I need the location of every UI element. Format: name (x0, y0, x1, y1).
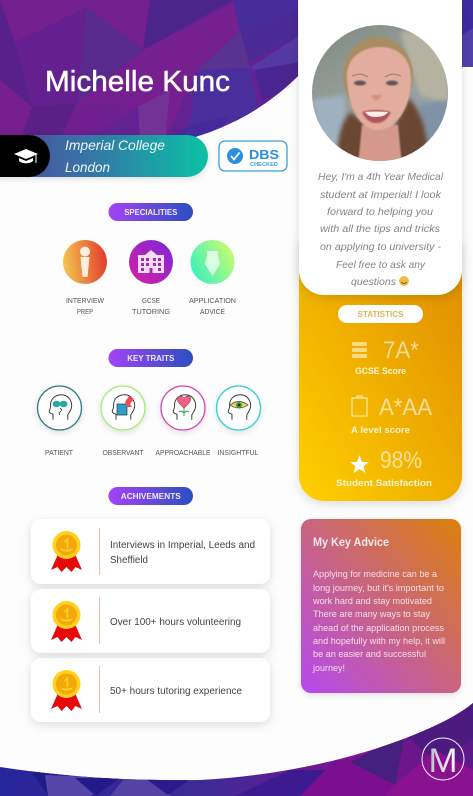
university name (65, 137, 165, 175)
speciality: application advice: APPLICATION (189, 296, 236, 305)
achievements heading (108, 487, 193, 505)
stat: student satisfaction: Student Satisfaction (336, 478, 432, 489)
icon: school building (138, 250, 164, 273)
speciality: application advice: ADVICE (200, 307, 225, 316)
icon: head with lotus (49, 395, 72, 420)
black cap segment (0, 135, 50, 177)
speciality: interview prep: PREP (77, 307, 93, 316)
logo: M monogram (422, 738, 464, 780)
stat: A level score: A*AA (379, 394, 432, 421)
panel: profile card (299, 0, 462, 295)
intro text: Hey, I'm a 4th Year Medical (318, 171, 444, 183)
DBS badge: DBS (249, 147, 279, 162)
intro text: questions (351, 276, 397, 288)
university name: London (65, 159, 110, 175)
speciality: interview prep (63, 240, 107, 316)
icon: microphone (80, 246, 90, 277)
intro text: Feel free to ask any (336, 259, 426, 271)
speciality: GCSE tutoring: TUTORING (132, 307, 170, 316)
university name: Imperial College (65, 137, 165, 153)
right edge purple strip (455, 0, 473, 67)
stat: A level score (351, 394, 432, 436)
advice body: and hopefully with my help, it will (313, 636, 445, 647)
achievement card: interviews: Sheffield (110, 555, 148, 566)
speciality: GCSE tutoring (129, 240, 173, 316)
advice body (312, 569, 445, 674)
stat: student satisfaction: 98% (380, 447, 422, 474)
panel: statistics (299, 240, 462, 501)
intro text: with all the tips and tricks (320, 223, 441, 235)
stat: A level score: A level score (351, 425, 410, 436)
speciality: interview prep: INTERVIEW (66, 296, 105, 305)
trait: approachable (156, 386, 210, 457)
stat: student satisfaction (336, 447, 432, 489)
panel: key advice (301, 519, 461, 693)
intro text (318, 171, 444, 288)
trait: insightful (216, 386, 260, 457)
trait: patient (38, 386, 82, 457)
trait: patient: PATIENT (45, 448, 73, 457)
name title: Michelle Kunc (45, 66, 230, 98)
footer polygon background (0, 700, 473, 796)
advice body: be an easier and successful (313, 649, 426, 660)
trait: observant: OBSERVANT (102, 448, 144, 457)
key traits heading (108, 349, 193, 367)
achievement card: volunteering: Over 100+ hours volunteering (110, 617, 241, 628)
icon: head with eye (228, 395, 251, 420)
intro text: forward to helping you (327, 206, 433, 218)
advice heading: My Key Advice (313, 535, 389, 549)
icon: fountain pen nib (205, 251, 220, 276)
specialities heading (108, 203, 193, 221)
achievements heading: ACHIVEMENTS (121, 492, 181, 501)
trait: insightful: INSIGHTFUL (218, 448, 258, 457)
advice body: There are many ways to stay (313, 609, 430, 620)
top corner lavender accent (462, 28, 473, 67)
speciality: application advice (189, 240, 236, 316)
stat: GCSE score: GCSE Score (355, 366, 406, 377)
advice body: journey! (312, 663, 345, 674)
achievement card: volunteering (31, 589, 270, 653)
logo: M monogram: M (428, 742, 458, 780)
icon: head with heart (173, 395, 196, 420)
DBS badge: CHECKED (250, 162, 278, 168)
trait: observant (101, 386, 145, 457)
achievement card: interviews: Interviews in Imperial, Leeds and (110, 540, 255, 551)
stat: GCSE score: 7A* (383, 337, 419, 364)
stat: GCSE score (352, 337, 419, 377)
advice body: ahead of the application process (313, 623, 444, 634)
achievement card: tutoring: 50+ hours tutoring experience (110, 686, 242, 697)
intro text: on applying to university - (320, 241, 441, 253)
achievement card: tutoring (31, 658, 270, 722)
university banner (0, 135, 208, 177)
statistics pill: STATISTICS (358, 310, 404, 319)
trait: approachable: APPROACHABLE (156, 448, 210, 457)
icon: head with puzzle (112, 395, 135, 420)
icon: smiling emoji (399, 276, 409, 286)
specialities heading: SPECIALITIES (124, 208, 178, 217)
DBS badge (219, 141, 287, 171)
advice body: Applying for medicine can be a (313, 569, 438, 580)
header polygon background (0, 0, 300, 140)
key traits heading: KEY TRAITS (127, 354, 175, 363)
intro text: student at Imperial! I look (320, 189, 442, 201)
achievement card: interviews (31, 519, 270, 584)
statistics pill (338, 305, 423, 323)
speciality: GCSE tutoring: GCSE (142, 296, 160, 305)
advice body: long journey, but it's important to (313, 583, 444, 594)
profile photo (312, 25, 448, 165)
advice body: work hard and stay motivated (312, 596, 432, 607)
icon: graduation cap (14, 149, 38, 163)
